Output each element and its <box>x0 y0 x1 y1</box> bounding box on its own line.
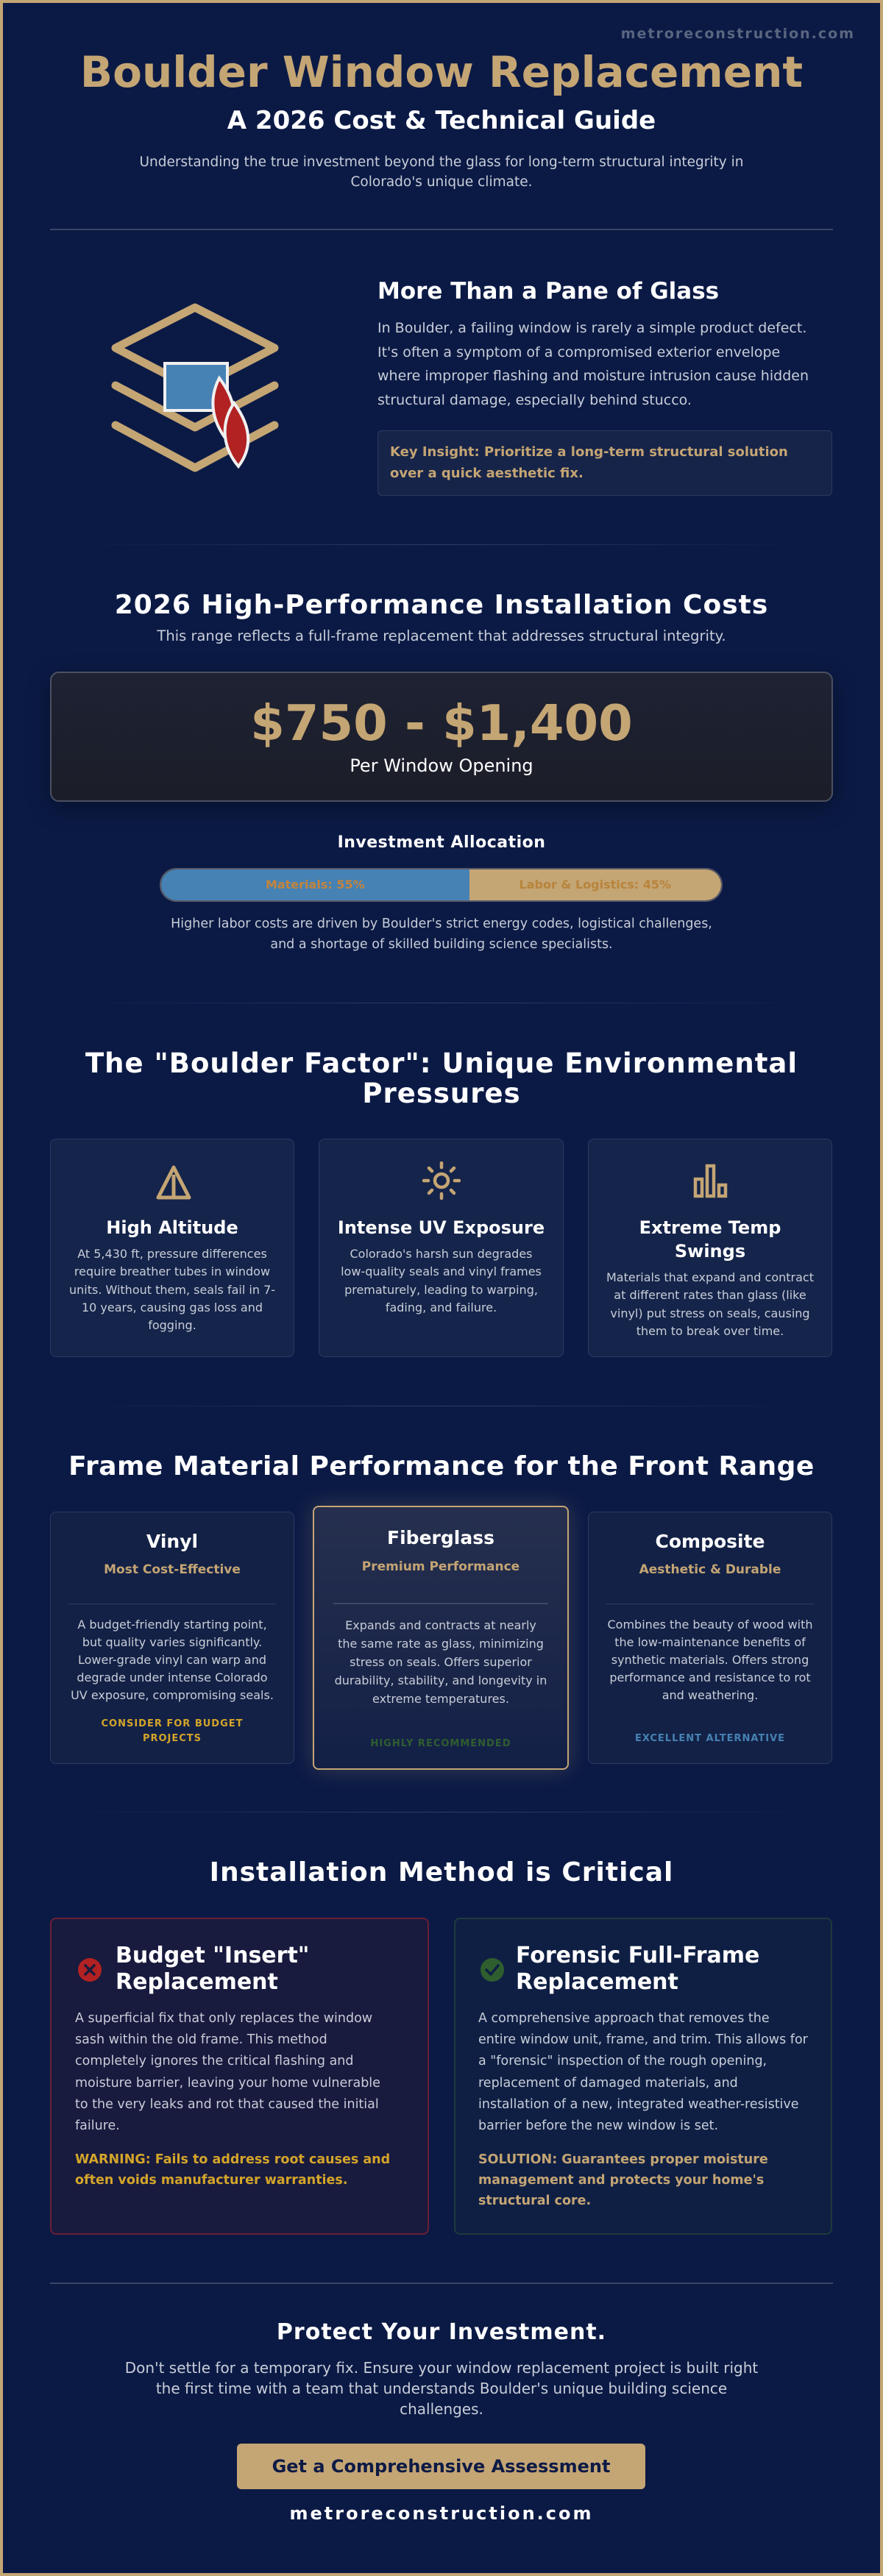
title: Forensic Full-Frame <box>516 1943 759 1968</box>
intro text: Understanding the true investment beyond the glass for long-term structural integrity in Colorado's unique climate. <box>140 154 743 190</box>
heading: boulder factor: The "Boulder Factor": Unique Environmental Pressures <box>85 1047 798 1109</box>
price: $750 - $1,400 <box>250 694 633 752</box>
tag: HIGHLY RECOMMENDED <box>370 1738 511 1749</box>
icon: bar chart <box>693 1164 727 1198</box>
bar chart: allocation: Labor & Logistics: 45% <box>519 878 671 892</box>
heading: investment allocation: Investment Allocation <box>338 833 545 852</box>
card: temp swings <box>588 1139 832 1357</box>
tag: EXCELLENT ALTERNATIVE <box>635 1733 785 1744</box>
heading: installation method: Installation Method is Critical <box>210 1857 673 1887</box>
footer url: metroreconstruction.com <box>289 2503 593 2524</box>
title: Boulder Window Replacement <box>80 47 803 97</box>
icon: sun <box>422 1161 461 1200</box>
card: high altitude <box>50 1139 294 1357</box>
card: composite <box>588 1512 832 1764</box>
solution: SOLUTION: Guarantees proper moisture management and protects your home's structural core. <box>478 2152 768 2208</box>
icon: x <box>78 1958 102 1982</box>
title: High Altitude <box>106 1217 238 1238</box>
cta text: Don't settle for a temporary fix. Ensure your window replacement project is built right the first time with a team that understands Boulder's unique building science challenges. <box>125 2359 758 2418</box>
text: the same rate as glass, minimizing stress on seals. Offers superior durability, stability, and longevity in extreme temperatures. <box>335 1637 547 1706</box>
title: Extreme Temp <box>639 1217 781 1238</box>
button: Get a Comprehensive Assessment <box>272 2456 610 2477</box>
card: uv <box>319 1139 564 1357</box>
paragraph: pane: In Boulder, a failing window is rarely a simple product defect. It's often a symptom of a compromised exterior envelope where improper flashing and moisture intrusion cause hidden structural damage, especially behind stucco. <box>377 320 809 408</box>
panel: full-frame <box>454 1918 832 2235</box>
warning: WARNING: Fails to address root causes and often voids manufacturer warranties. <box>75 2152 390 2188</box>
panel: budget insert <box>50 1918 429 2235</box>
title <box>116 1943 309 1995</box>
title <box>639 1217 781 1262</box>
text: Materials that expand and contract at different rates than glass (like vinyl) put stress on seals, causing them to break over time. <box>606 1270 814 1338</box>
heading: frame materials: Frame Material Performance for the Front Range <box>68 1451 815 1481</box>
title: Replacement <box>516 1969 678 1995</box>
heading: protect: Protect Your Investment. <box>277 2319 606 2345</box>
button <box>237 2444 645 2489</box>
costs subtitle: This range reflects a full-frame replacement that addresses structural integrity. <box>157 627 726 644</box>
card: fiberglass <box>313 1506 569 1770</box>
subtitle: Premium Performance <box>362 1559 519 1574</box>
callout: key insight <box>377 430 832 496</box>
subtitle: Aesthetic & Durable <box>639 1562 781 1577</box>
title <box>516 1943 759 1995</box>
text: Expands and contracts at nearly <box>345 1618 536 1632</box>
heading: costs: 2026 High-Performance Installation Costs <box>115 590 768 620</box>
text: Combines the beauty of wood with the low-maintenance benefits of synthetic materials. Offers strong performance and resistance to rot and weathering. <box>607 1618 813 1702</box>
text: A budget-friendly starting point, but quality varies significantly. Lower-grade vinyl can warp and degrade under intense Colorado UV exposure, compromising seals. <box>71 1618 274 1702</box>
icon: warning <box>156 1165 191 1199</box>
text: Colorado's harsh sun degrades low-quality seals and vinyl frames prematurely, leading to warping, fading, and failure. <box>341 1247 542 1314</box>
subtitle: A 2026 Cost & Technical Guide <box>227 106 656 135</box>
watermark: metroreconstruction.com <box>621 26 855 42</box>
title: Vinyl <box>146 1531 198 1552</box>
tag: CONSIDER FOR BUDGET PROJECTS <box>101 1718 244 1744</box>
title: Replacement <box>116 1969 278 1995</box>
bar note: Higher labor costs are driven by Boulder's strict energy codes, logistical challenges, and a shortage of skilled building science specialists. <box>171 917 712 952</box>
text: A comprehensive approach that removes the entire window unit, frame, and trim. This allows for a "forensic" inspection of the rough opening, replacement of damaged materials, and installation of a new, integrated weather-resistive barrier before the new window is set. <box>478 2011 808 2133</box>
icon: layers with damage <box>112 303 278 472</box>
text: A superficial fix that only replaces the window sash within the old frame. This method completely ignores the critical flashing and moisture barrier, leaving your home vulnerable to the very leaks and rot that caused the initial failure. <box>75 2011 380 2133</box>
price label: Per Window Opening <box>350 755 533 776</box>
title: Fiberglass <box>387 1527 494 1548</box>
title: Composite <box>655 1531 765 1552</box>
bar chart: allocation <box>160 868 723 902</box>
title: Intense UV Exposure <box>338 1217 545 1238</box>
subtitle: Most Cost-Effective <box>104 1562 241 1577</box>
text: At 5,430 ft, pressure differences require breather tubes in window units. Without them, seals fail in 7-10 years, causing gas loss and fogging. <box>69 1247 275 1332</box>
section heading: more than a pane: More Than a Pane of Glass <box>377 278 719 305</box>
price box <box>50 672 833 802</box>
title: Swings <box>675 1241 745 1262</box>
callout: key insight: Key Insight: Prioritize a long-term structural solution over a quick aesthetic fix. <box>390 444 788 481</box>
bar chart: allocation: Materials: 55% <box>266 878 365 892</box>
title: Budget "Insert" <box>116 1943 309 1968</box>
icon: check <box>480 1958 504 1982</box>
card: vinyl <box>50 1512 294 1764</box>
